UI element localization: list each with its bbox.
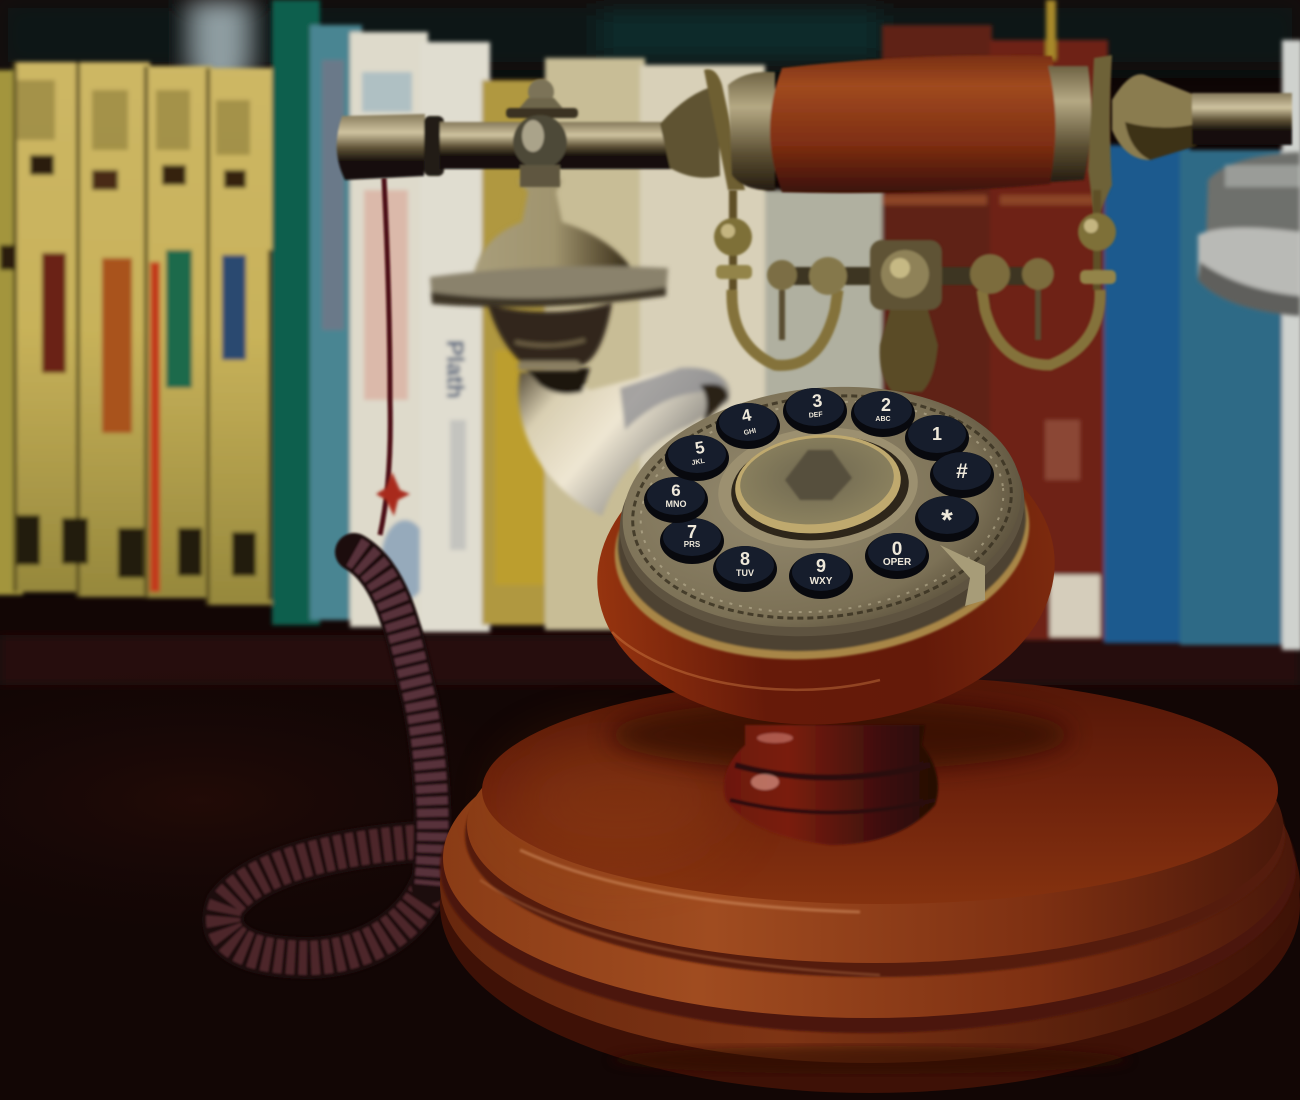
key 3 bbox=[783, 388, 847, 434]
shelf ledge and table bbox=[0, 598, 1300, 1100]
white book: Plath: Plath bbox=[441, 340, 468, 399]
key 3: DEF bbox=[808, 411, 824, 420]
key 6 bbox=[644, 477, 708, 523]
green book bbox=[272, 0, 320, 625]
key 4: 4 bbox=[740, 405, 754, 426]
upper wooden body bbox=[587, 404, 1065, 740]
handset bbox=[728, 55, 1292, 222]
key 7: 7 bbox=[687, 522, 697, 542]
key 5: 5 bbox=[693, 438, 706, 458]
thin red wire bbox=[380, 178, 390, 535]
key 7: PRS bbox=[684, 540, 701, 549]
right ferrule bbox=[1048, 66, 1091, 182]
right hook bbox=[982, 290, 1100, 365]
blue books bbox=[1104, 145, 1190, 643]
key 2 bbox=[851, 391, 915, 437]
keypad buttons bbox=[644, 388, 994, 599]
cord lower loop bbox=[223, 842, 432, 958]
key 9 bbox=[789, 553, 853, 599]
key hash bbox=[930, 452, 994, 498]
brass dial plate rim bbox=[603, 393, 1041, 679]
key 6: 6 bbox=[671, 481, 681, 500]
key star: * bbox=[941, 504, 953, 537]
dial face bbox=[608, 368, 1036, 656]
key 4: GHI bbox=[743, 428, 757, 437]
key 3: 3 bbox=[811, 390, 823, 411]
key 4 bbox=[716, 403, 780, 449]
key 5 bbox=[665, 435, 729, 481]
key 0 bbox=[865, 533, 929, 579]
key 2: 2 bbox=[881, 395, 891, 415]
yellow and cream books bbox=[482, 80, 550, 625]
key 8: 8 bbox=[740, 549, 750, 569]
key 1: 1 bbox=[932, 424, 942, 444]
bookshelf: row of blurred books bbox=[0, 0, 1300, 650]
telephone cord bbox=[223, 178, 433, 958]
white book with red title bbox=[350, 32, 429, 627]
key 6: MNO bbox=[666, 499, 686, 509]
blue-grey book bbox=[310, 25, 362, 620]
yellow book set bbox=[0, 62, 280, 605]
base moulding bbox=[440, 707, 1300, 1063]
left ferrule bbox=[728, 72, 775, 190]
key hash: # bbox=[956, 460, 968, 483]
wooden base bbox=[440, 676, 1300, 1093]
horn mouthpiece stem bbox=[518, 368, 730, 516]
key 5: JKL bbox=[691, 458, 706, 467]
bell hanger and hooks bbox=[714, 190, 1116, 392]
base top disk bbox=[482, 676, 1278, 904]
candlestick column and flange bbox=[430, 180, 668, 371]
centre medallion bbox=[713, 420, 923, 556]
wood handle bbox=[770, 55, 1057, 193]
silver canister right bbox=[1198, 152, 1300, 316]
key 2: ABC bbox=[875, 416, 891, 423]
key 9: WXY bbox=[810, 576, 833, 587]
pedestal bbox=[724, 725, 938, 845]
key 8: TUV bbox=[736, 568, 754, 578]
key 0: 0 bbox=[892, 539, 902, 560]
cord upper run bbox=[354, 552, 433, 885]
white book: Plath bbox=[420, 42, 490, 632]
base bottom tier bbox=[440, 717, 1300, 1093]
left hook bbox=[732, 290, 838, 365]
key 8 bbox=[713, 546, 777, 592]
key 7 bbox=[660, 518, 724, 564]
cradle bar bbox=[337, 69, 745, 190]
red star on book behind wire bbox=[376, 472, 410, 516]
key star bbox=[915, 496, 979, 542]
key 9: 9 bbox=[816, 556, 826, 576]
red books bbox=[882, 25, 992, 525]
key 0: OPER bbox=[883, 557, 912, 568]
key 1 bbox=[905, 415, 969, 461]
